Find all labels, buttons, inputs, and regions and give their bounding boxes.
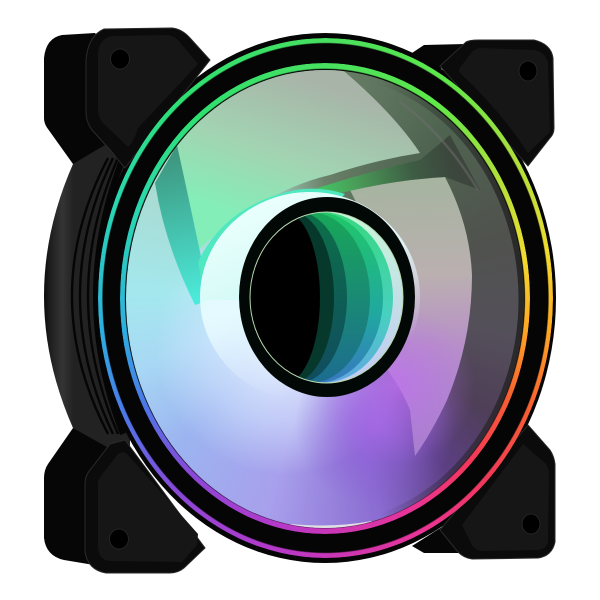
inner RGB light ring <box>120 63 530 534</box>
fan blade shapes <box>155 70 524 528</box>
fan body side <box>44 130 130 460</box>
front corner plates <box>85 28 555 573</box>
body ridges <box>72 158 123 434</box>
hub white halo <box>200 192 420 378</box>
fan blade disc <box>126 70 524 528</box>
lower purple glow <box>302 372 448 482</box>
right rim shading <box>388 86 524 516</box>
top-right rim streak <box>400 102 478 190</box>
infinity mirror hub <box>239 197 415 397</box>
mirror bands <box>298 212 402 382</box>
blade: bright teal sweep <box>198 189 345 300</box>
bottom silver sliver <box>290 523 372 527</box>
inner plate panels <box>98 35 550 562</box>
blade: upper panel <box>177 70 420 249</box>
blade: purple glow <box>352 329 469 448</box>
mirror edge line <box>250 212 403 383</box>
blade: dark green sweep <box>316 135 480 193</box>
hub black rim <box>239 197 415 397</box>
black ring housing <box>94 33 556 563</box>
blade: teal strip <box>155 145 210 305</box>
disc soft glow <box>170 287 391 465</box>
blade: right panel <box>350 177 472 456</box>
rear corner brackets <box>44 33 470 566</box>
mounting holes <box>110 49 540 549</box>
outer RGB light ring <box>98 38 553 558</box>
